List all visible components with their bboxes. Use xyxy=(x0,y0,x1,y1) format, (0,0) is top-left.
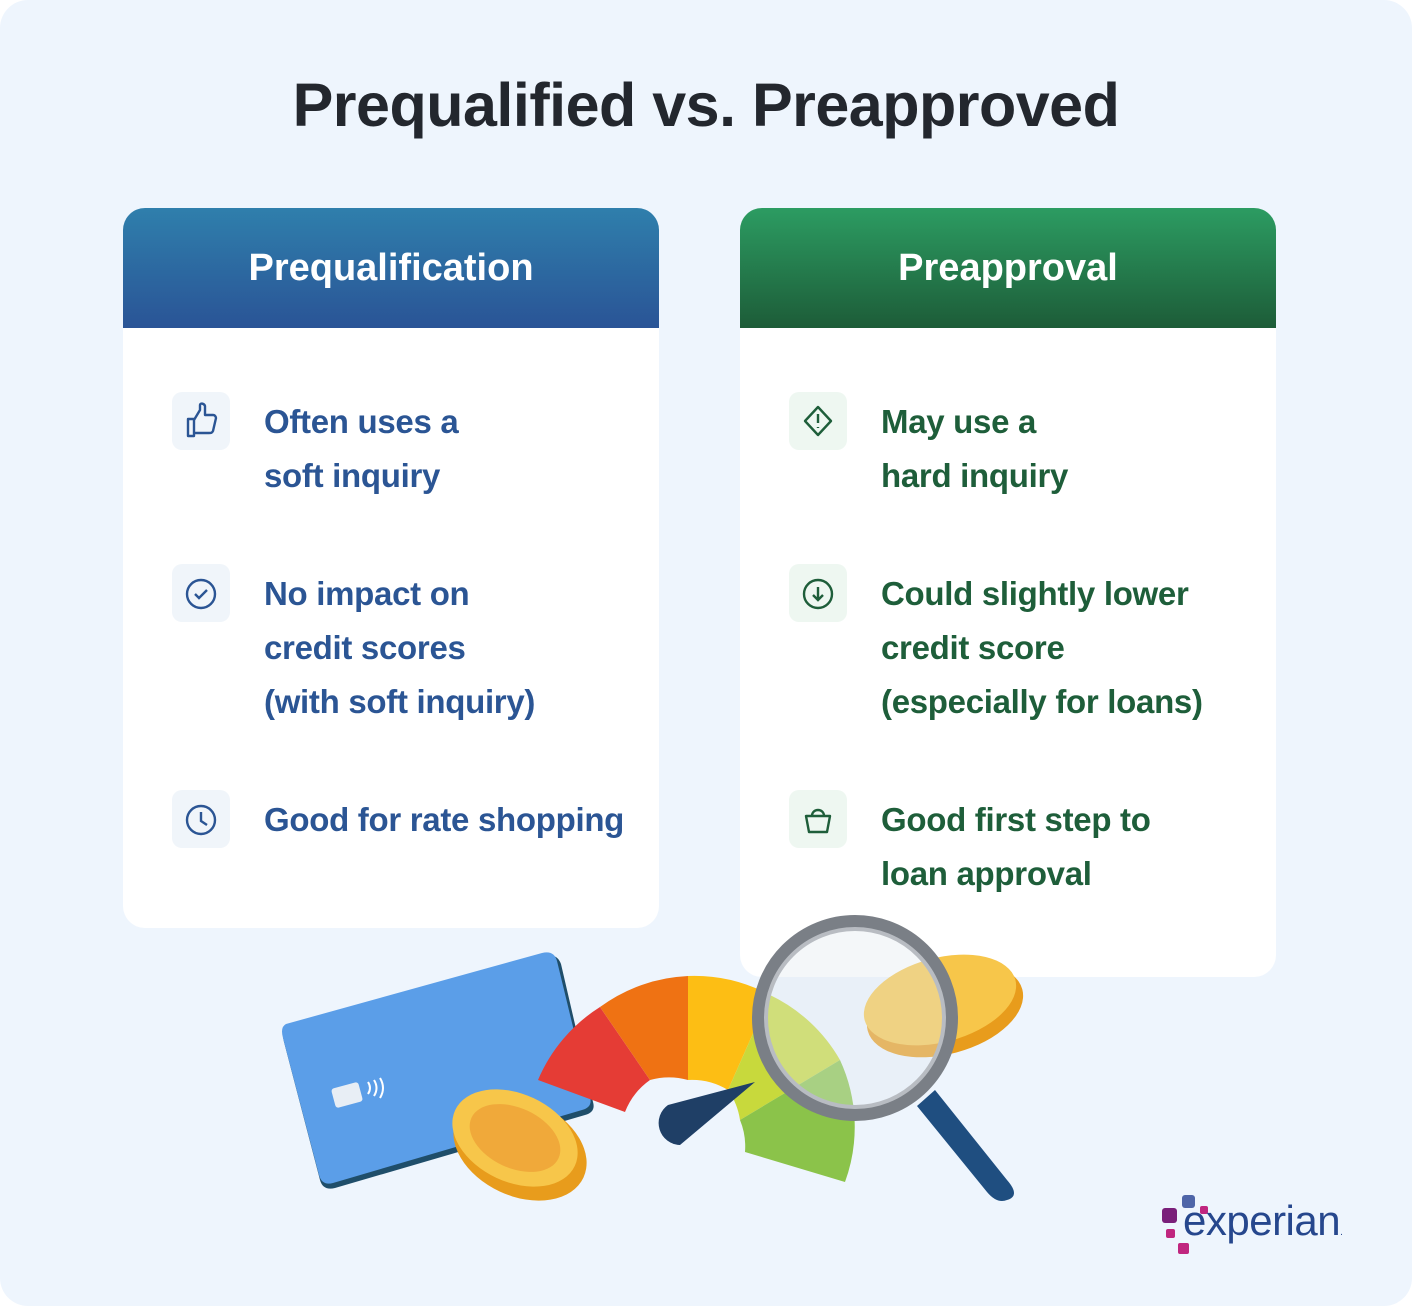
item: soft inquiry: Often uses a xyxy=(264,403,458,440)
item: lower score: credit score xyxy=(881,629,1064,666)
header: preapproval: Preapproval xyxy=(898,247,1118,289)
header: prequalification: Prequalification xyxy=(248,247,534,289)
item: no impact: No impact on xyxy=(264,575,469,612)
illustration: card, gauge, magnifier, coins xyxy=(282,915,1024,1201)
item: soft inquiry: soft inquiry xyxy=(264,457,440,494)
icon: check circle xyxy=(172,564,230,622)
item: rate shopping: Good for rate shopping xyxy=(264,801,624,838)
item: no impact xyxy=(172,564,535,720)
coin left xyxy=(436,1070,604,1221)
item: lower score: (especially for loans) xyxy=(881,683,1203,720)
panel: preapproval xyxy=(740,208,1276,977)
item: lower score xyxy=(789,564,1203,720)
coin right xyxy=(854,939,1034,1073)
item: no impact: (with soft inquiry) xyxy=(264,683,535,720)
item: lower score: Could slightly lower xyxy=(881,575,1189,612)
item: hard inquiry: May use a xyxy=(881,403,1036,440)
item: hard inquiry xyxy=(789,392,1068,494)
item: hard inquiry: hard inquiry xyxy=(881,457,1068,494)
item: first step: Good first step to xyxy=(881,801,1151,838)
icon: thumbs up xyxy=(172,392,230,450)
item: rate shopping xyxy=(172,790,624,848)
icon: basket xyxy=(789,790,847,848)
icon: warning diamond xyxy=(789,392,847,450)
gauge xyxy=(538,976,855,1182)
icon: clock xyxy=(172,790,230,848)
title: Prequalified vs. Preapproved xyxy=(293,71,1119,139)
panel: prequalification xyxy=(123,208,659,928)
item: no impact: credit scores xyxy=(264,629,466,666)
item: first step: loan approval xyxy=(881,855,1092,892)
logo: experian: experian. xyxy=(1183,1197,1342,1244)
item: first step xyxy=(789,790,1151,892)
magnifier xyxy=(759,922,1014,1201)
item: soft inquiry xyxy=(172,392,459,494)
header: preapproval xyxy=(740,208,1276,328)
header: prequalification xyxy=(123,208,659,328)
credit card xyxy=(282,952,594,1189)
icon: down arrow circle xyxy=(789,564,847,622)
